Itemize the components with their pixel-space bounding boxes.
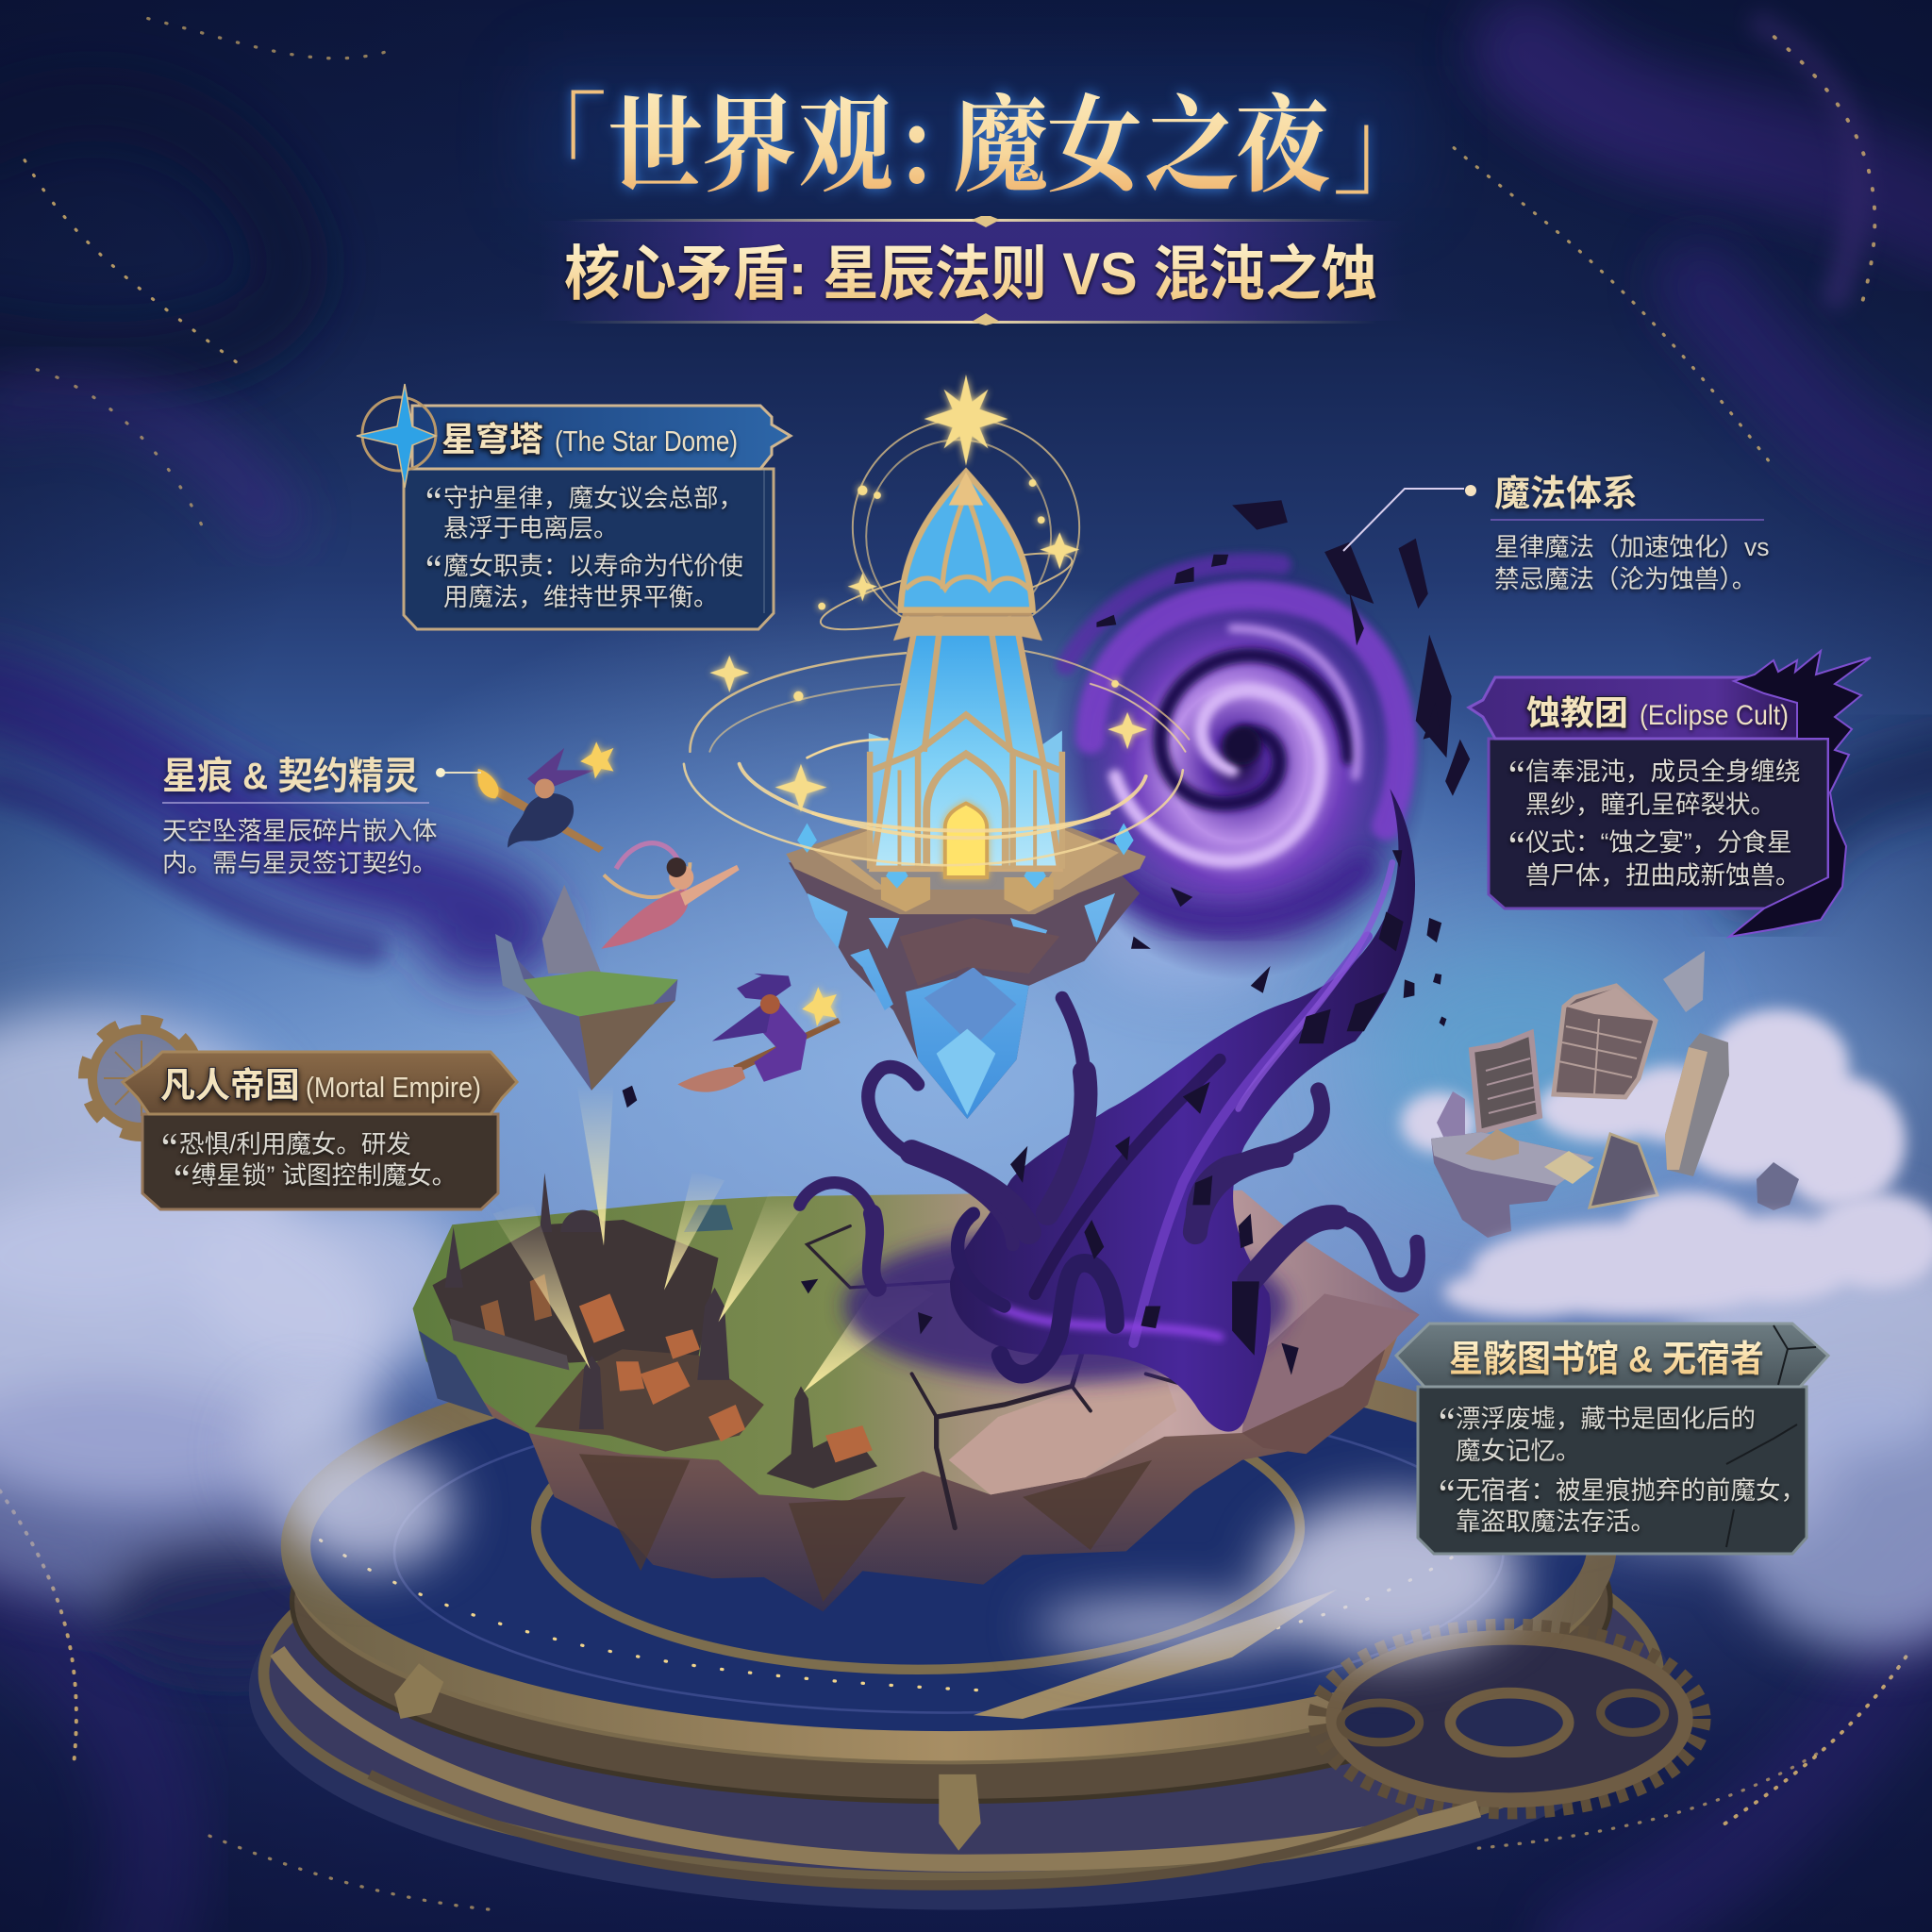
foreground clouds [241, 1386, 1639, 1657]
illustration: spirit dancer [601, 843, 740, 949]
callout text [162, 817, 438, 877]
panel text: “ [154, 1155, 192, 1208]
title brackets [502, 58, 1438, 216]
callout: star marks and contract spirits [162, 756, 481, 877]
broken shelves [1472, 986, 1729, 1176]
panel text: 无宿者：被星痕抛弃的前魔女， [1456, 1476, 1806, 1505]
dark tendrils [1729, 651, 1871, 937]
floating rock under tower [789, 862, 1140, 1119]
panel text: 靠盗取魔法存活。 [1456, 1507, 1656, 1536]
subtitle band [538, 216, 1406, 325]
callout heading: 星痕 & 契约精灵 [162, 756, 419, 797]
illustration: witch on purple broom [677, 974, 841, 1092]
panel text: 魔女职责：以寿命为代价使 [443, 552, 743, 580]
panel text: “ [406, 477, 443, 531]
panel text: 缚星锁” 试图控制魔女。 [192, 1161, 457, 1190]
title [502, 58, 1438, 216]
illustration: star dome tower [684, 375, 1189, 1119]
panel heading: 凡人帝国 [160, 1066, 300, 1105]
callout text: 内。需与星灵签订契约。 [162, 849, 438, 877]
title brackets: 「 [502, 58, 608, 210]
panel heading: (The Star Dome) [555, 425, 738, 458]
panel heading: 蚀教团 [1526, 693, 1628, 732]
orbiting stars [709, 375, 1147, 812]
panel text: 恐惧/利用魔女。研发 [179, 1130, 411, 1158]
callout: magic system [1343, 475, 1770, 593]
illustration: central floating island [413, 1191, 1420, 1611]
panel heading: 星穹塔 [441, 420, 543, 458]
orbit rings front [684, 684, 1185, 865]
panel text: 魔女记忆。 [1456, 1437, 1581, 1465]
panel text [1489, 751, 1800, 890]
panel text: 黑纱，瞳孔呈碎裂状。 [1525, 791, 1775, 819]
tower body [869, 731, 1062, 869]
title text: 世界观:魔女之夜 [608, 62, 1330, 212]
panel heading [160, 1066, 481, 1105]
panel: star dome [357, 384, 791, 629]
panel: mortal empire [85, 1022, 517, 1209]
callout heading: 魔法体系 [1494, 475, 1638, 514]
vortex [1047, 548, 1429, 991]
illustration: mortal empire city [432, 1173, 877, 1489]
panel text: “ [406, 545, 443, 599]
title brackets: 」 [1332, 64, 1438, 216]
orbit rings behind [690, 419, 1189, 752]
ruin clouds back [1401, 1009, 1906, 1208]
panel text: 用魔法，维持世界平衡。 [443, 583, 719, 611]
panel text: 漂浮废墟，藏书是固化后的 [1456, 1405, 1756, 1433]
icon: compass star [357, 384, 436, 488]
panel text: 守护星律，魔女议会总部， [443, 484, 743, 512]
panel: eclipse cult [1469, 651, 1871, 937]
callout text: 禁忌魔法（沦为蚀兽）。 [1494, 565, 1757, 593]
subtitle text: 核心矛盾: 星辰法则 VS 混沌之蚀 [564, 242, 1377, 308]
tentacles [800, 998, 1418, 1374]
illustration: small floating island [495, 885, 677, 1091]
panel text: “ [1419, 1398, 1457, 1452]
icon: gear [85, 1022, 198, 1135]
panel text: “ [1489, 822, 1526, 875]
platform [786, 828, 1146, 914]
gear [1317, 1627, 1702, 1810]
panel heading: (Mortal Empire) [306, 1071, 481, 1104]
panel heading [1526, 693, 1789, 732]
callout text: 天空坠落星辰碎片嵌入体 [162, 817, 438, 845]
panel text: “ [142, 1124, 179, 1177]
panel heading: 星骸图书馆 & 无宿者 [1449, 1340, 1764, 1380]
panel heading [441, 420, 738, 458]
tornado column [950, 789, 1415, 1432]
panel heading: (Eclipse Cult) [1640, 700, 1789, 731]
floating rocks [1663, 951, 1799, 1210]
panel text [1419, 1398, 1806, 1536]
ruin base rock [1431, 1132, 1594, 1238]
light beams from city [492, 1084, 934, 1392]
illustration: floating library ruins [1401, 951, 1932, 1317]
chaos pool [844, 1230, 1288, 1382]
illustration: witch with lit broom [477, 741, 613, 853]
panel text: “ [1489, 751, 1526, 805]
illustration: bottom astrolabe platform [249, 1347, 1702, 1909]
callout text: 星律魔法（加速蚀化）vs [1494, 533, 1770, 561]
panel text: 兽尸体，扭曲成新蚀兽。 [1525, 861, 1800, 890]
panel text: “ [1419, 1470, 1457, 1524]
panel text [406, 477, 743, 611]
panel: star library and the unhoused [1396, 1324, 1828, 1554]
panel text [142, 1124, 457, 1208]
panel text: 悬浮于电离层。 [443, 514, 619, 542]
illustration: chaos tornado and tentacles [623, 500, 1470, 1432]
panel text: 仪式：“蚀之宴”，分食星 [1525, 828, 1792, 857]
ruin clouds front [1443, 1191, 1932, 1317]
panel text: 信奉混沌，成员全身缠绕 [1525, 758, 1800, 786]
background clouds [0, 1010, 1932, 1670]
callout text [1494, 533, 1770, 593]
black shards [623, 500, 1470, 1375]
